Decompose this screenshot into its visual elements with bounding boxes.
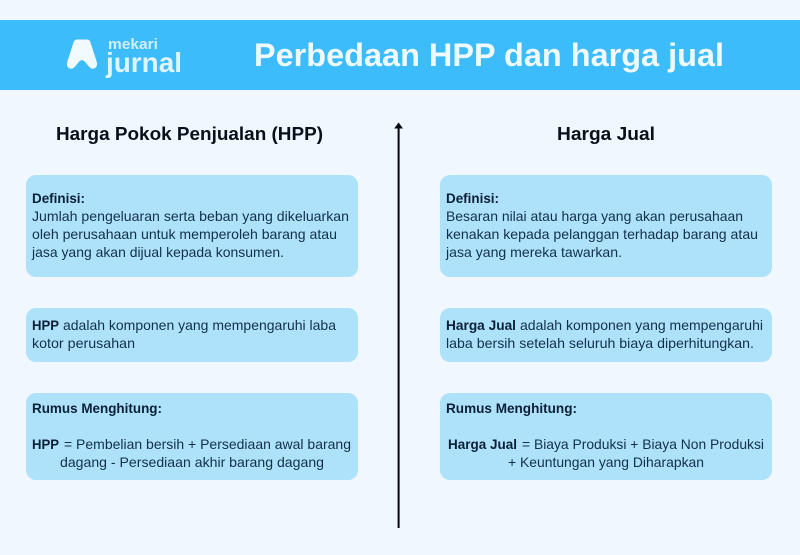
panel: rumus HPP: HPP	[32, 437, 59, 452]
panel: rumus harga jual: Harga Jual	[448, 437, 517, 452]
panel: harga jual laba bersih: Harga Jual	[446, 318, 516, 333]
panel: rumus HPP: = Pembelian bersih + Persediaan awal barang	[64, 437, 351, 452]
title: Perbedaan HPP dan harga jual	[254, 37, 724, 73]
logo: mekari jurnal	[67, 36, 182, 78]
panel: definisi HPP: oleh perusahaan untuk memperoleh barang atau	[32, 227, 337, 242]
logo: mekari jurnal: mekari	[108, 36, 158, 53]
icon: logo A mark	[67, 40, 97, 69]
panel: harga jual laba bersih: laba bersih setelah seluruh biaya diperhitungkan.	[446, 336, 754, 351]
panel: rumus harga jual: + Keuntungan yang Diharapkan	[508, 455, 704, 470]
panel: harga jual laba bersih	[440, 308, 772, 362]
panel: rumus HPP: Rumus Menghitung:	[32, 401, 162, 416]
panel: HPP laba kotor	[26, 308, 358, 362]
logo: mekari jurnal: jurnal	[105, 47, 182, 78]
panel: definisi HPP: Jumlah pengeluaran serta beban yang dikeluarkan	[32, 209, 349, 224]
panel: definisi HPP	[26, 175, 358, 277]
panel: rumus HPP: dagang - Persediaan akhir barang dagang	[60, 455, 324, 470]
panel: definisi harga jual	[440, 175, 772, 277]
heading: Harga Jual: Harga Jual	[557, 123, 655, 144]
panel: HPP laba kotor: adalah komponen yang mempengaruhi laba	[63, 318, 336, 333]
panel: rumus harga jual: = Biaya Produksi + Biaya Non Produksi	[522, 437, 764, 452]
panel: HPP laba kotor: kotor perusahan	[32, 336, 135, 351]
panel: definisi harga jual: Definisi:	[446, 191, 499, 206]
heading: Harga Pokok Penjualan (HPP): Harga Pokok Penjualan (HPP)	[56, 123, 323, 144]
panel: definisi harga jual: kenakan kepada pelanggan terhadap barang atau	[446, 227, 758, 242]
panel: harga jual laba bersih: adalah komponen yang mempengaruhi	[520, 318, 763, 333]
panel: definisi harga jual: jasa yang mereka tawarkan.	[445, 245, 622, 260]
panel: rumus harga jual: Rumus Menghitung:	[446, 401, 577, 416]
panel: HPP laba kotor: HPP	[32, 318, 59, 333]
panel: definisi harga jual: Besaran nilai atau harga yang akan perusahaan	[446, 209, 743, 224]
panel: definisi HPP: jasa yang akan dijual kepada konsumen.	[31, 245, 284, 260]
panel: definisi HPP: Definisi:	[32, 191, 85, 206]
panel: rumus harga jual	[440, 393, 772, 480]
header banner	[0, 20, 800, 90]
panel: rumus HPP	[26, 393, 358, 480]
arrow: vertical divider	[394, 122, 403, 528]
